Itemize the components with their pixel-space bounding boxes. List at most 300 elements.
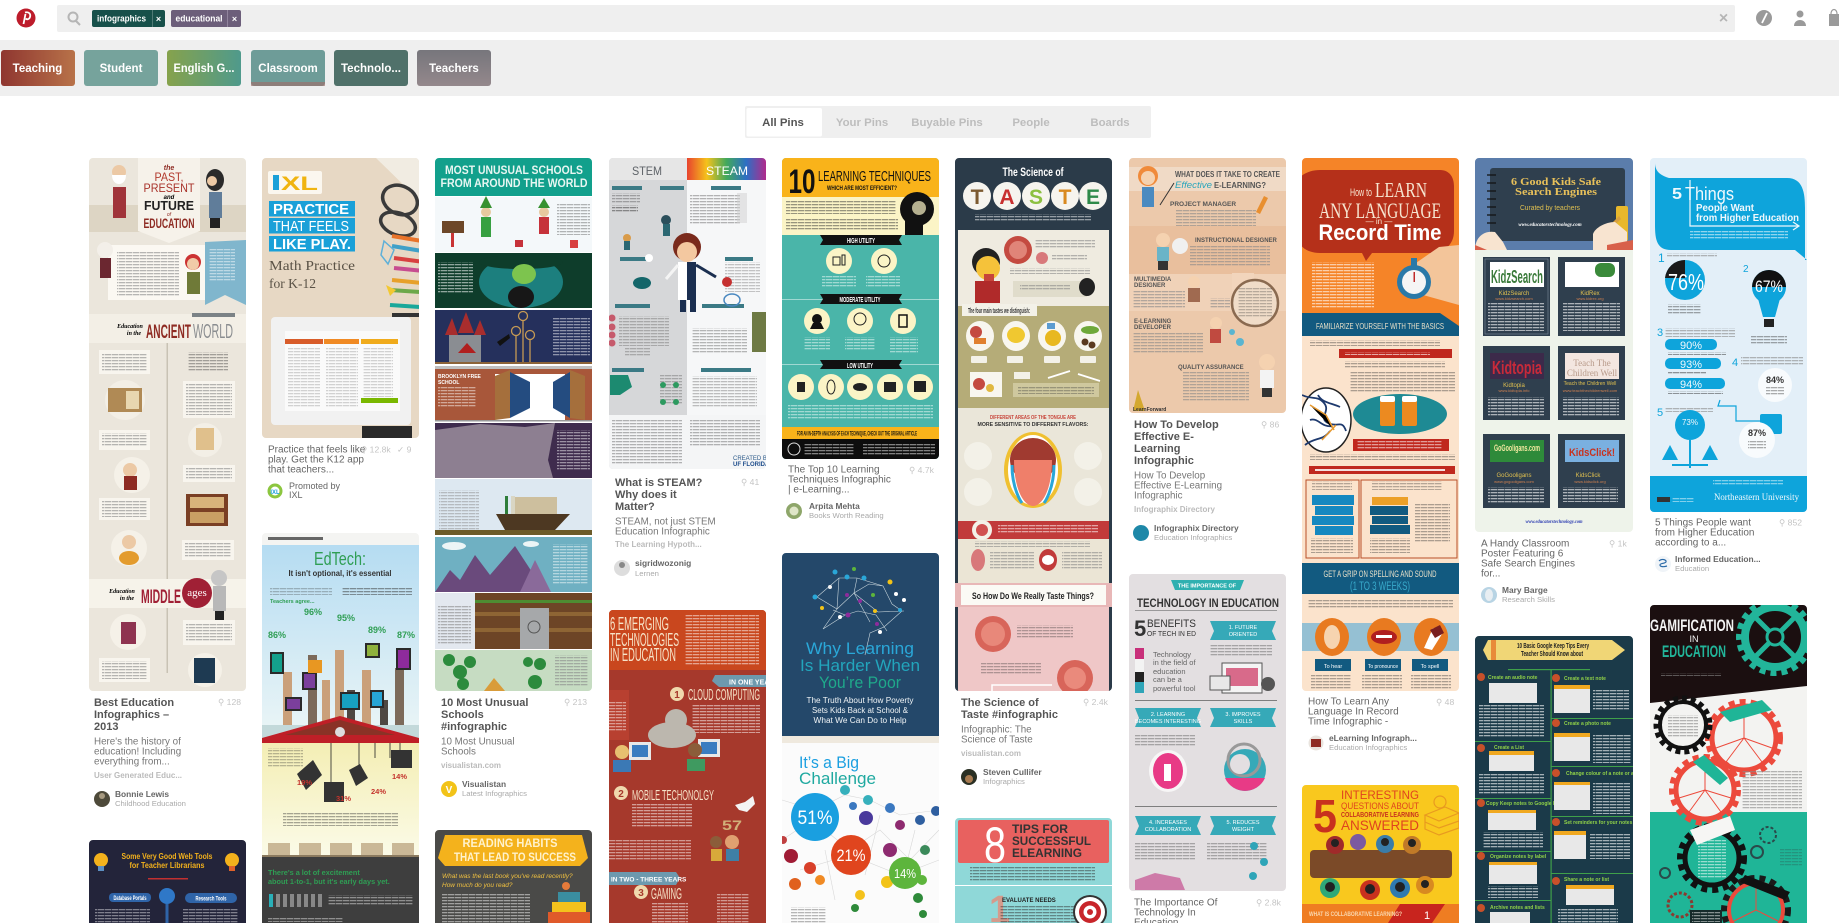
pin: web tools for teacher librarians: Research Tools (196, 896, 227, 902)
pin title: Learning (1134, 443, 1180, 455)
stat: 73 percent scale (1662, 410, 1718, 468)
icon: bag (1829, 10, 1839, 26)
pin attribution: Visualistan (462, 779, 506, 789)
big challenge heading: It’s a Big (799, 753, 859, 772)
pin: reading habits: THAT LEAD TO SUCCESS (454, 852, 576, 864)
pin: google keep tips: Create a photo note (1564, 721, 1611, 727)
stat: 84 percent (1758, 368, 1792, 402)
search engine card: kidtopia: www.kidtopia.info (1499, 388, 1530, 393)
pin: best education infographics (89, 158, 246, 808)
guide tile: student (84, 50, 158, 86)
pin: google keep tips: Create an audio note (1488, 675, 1538, 681)
pin image: learning techniques: LOW UTILITY (847, 361, 873, 370)
active tab: all pins (746, 108, 822, 136)
search chip: educational: educational (176, 14, 222, 24)
guide tile: teachers: Teachers (429, 63, 479, 75)
icon: black gear (1656, 698, 1710, 752)
pin image: five things: People Want (1696, 203, 1755, 214)
pin: six emerging technologies: IN TWO - THREE YEARS (611, 876, 687, 884)
pin image: technology in education: 5 (1134, 616, 1146, 641)
pin title: Infographics – (94, 709, 169, 721)
pin image: effective e-learning: INSTRUCTIONAL DESIGNER (1195, 238, 1278, 244)
pin: edtech: It isn't optional, it's essential (288, 568, 392, 578)
stat: 76 percent (1665, 260, 1705, 300)
pin: reading habits (435, 830, 592, 923)
pin image: science of taste: T (971, 186, 984, 209)
pin source: visualistan.com (441, 761, 501, 770)
pin image: stem vs steam: CREATED BY (733, 456, 771, 462)
pin image: stem vs steam: STEAM (706, 164, 748, 178)
pin image: past present future of education: Education (108, 589, 135, 595)
pin description: STEAM, not just STEM (615, 516, 716, 528)
pin: six emerging technologies: TECHNOLOGIES (610, 630, 679, 650)
pin title: The Top 10 Learning (788, 464, 880, 476)
icon: pinterest logo (16, 8, 36, 28)
pin title: 5 Things People want (1655, 518, 1751, 528)
pin image: effective e-learning: Effective (1175, 180, 1212, 190)
pin image: past present future of education: ages (187, 587, 207, 599)
why learning heading: Why Learning (806, 640, 914, 658)
pin title: Time Infographic - (1308, 716, 1388, 728)
pin image: technology in education: Technology (1153, 650, 1191, 659)
pin: ixl practice (262, 158, 424, 500)
pin: edtech: 24% (371, 787, 386, 796)
active tab: all pins: All Pins (762, 117, 804, 129)
pin image: ixl ad: XL (281, 174, 319, 195)
pin title: | e-Learning... (788, 484, 850, 496)
pin image: past present future of education: WORLD (193, 321, 233, 343)
pin image: learn any language (1296, 158, 1459, 691)
stat: 67 percent bulb: 67% (1755, 277, 1783, 296)
pin image: learn any language: To hear (1324, 664, 1342, 670)
search engine card: teach the children well: Teach The (1573, 358, 1611, 368)
pin description: education! Including (94, 746, 181, 758)
top navigation bar (16, 5, 1839, 32)
pin: edtech: There's a lot of excitement (268, 868, 360, 877)
pin attribution: Research Skills (1502, 595, 1555, 604)
repin count: ⚲ 41 (741, 477, 759, 487)
pin attribution (268, 481, 341, 500)
pin: why learning is harder (779, 553, 941, 923)
pin image: unusual schools (435, 158, 592, 691)
pin image: technology in education: ORIENTED (1229, 632, 1257, 638)
pin: five things from higher education (1650, 158, 1807, 573)
pin title: Schools (441, 709, 484, 721)
pin: 8 tips elearning: SUCCESSFUL (1012, 834, 1091, 848)
pin image: unusual schools: FROM AROUND THE WORLD (440, 178, 588, 190)
pin image: past present future of education: ANCIENT (146, 322, 191, 343)
pin attribution (1481, 585, 1555, 604)
pin: google keep tips: 10 Basic Google Keep Tips Every (1517, 643, 1589, 650)
pin description: How To Develop (1134, 470, 1206, 482)
pin title: Why does it (615, 489, 677, 501)
stat pills (1665, 339, 1726, 394)
icon: profile (1794, 10, 1806, 26)
icon: clear search: × (1719, 10, 1728, 27)
pin image: ixl ad: THAT FEELS (273, 219, 349, 235)
repin count: ⚲ 128 (218, 697, 241, 707)
pin: 8 tips elearning: EVALUATE NEEDS (1002, 898, 1056, 904)
pin image: effective e-learning: DEVELOPER (1134, 325, 1172, 331)
pin image: learning techniques: FOR AN IN-DEPTH ANALYSIS OF EACH TECHNIQUE, CHECK OUT THE ORIGINAL ARTICLE (797, 430, 917, 438)
pin: why learning is harder: You’re Poor (819, 674, 901, 692)
pin: edtech: 31% (336, 794, 351, 803)
pin: gamification in education (1650, 601, 1811, 923)
pin attribution: Arpita Mehta (809, 501, 860, 511)
pin image: technology in education: 3. IMPROVES (1225, 712, 1261, 718)
pin image: learn any language: GET A GRIP ON SPELLING AND SOUND (1324, 569, 1437, 579)
pin title: Practice that feels like (268, 444, 366, 456)
pin: reading habits: What was the last book you've read recently? (442, 873, 573, 880)
pin image: learn any language: — in — (1366, 217, 1392, 226)
pin image: six kids search engines: 6 Good Kids Safe (1511, 176, 1601, 188)
pin: collaborative learning questions: ANSWERED (1341, 817, 1419, 833)
pin image: technology in education: in the field of (1153, 658, 1196, 667)
pin: how to learn any language (1296, 158, 1459, 752)
pin image: technology in education: BECOMES INTERESTING (1135, 719, 1201, 725)
pin: why learning is harder: The Truth About How Poverty (806, 696, 914, 705)
pin attribution: IXL (289, 490, 303, 500)
pin description: Science of Taste (961, 734, 1033, 746)
pin description: Schools (441, 746, 476, 758)
pin attribution: Mary Barge (1502, 585, 1548, 595)
search engine card: kidzsearch: www.kidzsearch.com (1495, 296, 1533, 301)
pin image: effective e-learning: LearnForward (1133, 407, 1166, 413)
guide tile: teaching (1, 50, 75, 86)
pin: google keep tips: Archive notes and lists (1490, 905, 1545, 911)
pin: six emerging technologies: IN EDUCATION (610, 645, 676, 665)
pin image: stem vs steam: UF FLORIDA (733, 462, 770, 468)
guide tile: student: Student (100, 63, 143, 75)
pin: 8 tips elearning: ELEARNING (1012, 846, 1082, 860)
pin image: five things: Northeastern University (1714, 493, 1799, 503)
pin image: science of taste: S (1029, 186, 1043, 209)
pin title: that teachers... (268, 464, 334, 476)
repin count: ⚲ 86 (1261, 420, 1279, 430)
pin attribution: Education (1675, 564, 1709, 573)
pin title: Poster Featuring 6 (1481, 548, 1564, 560)
search engine card: gogooligans: GoGooligans.com (1494, 443, 1540, 453)
pin source: visualistan.com (961, 749, 1021, 758)
repin count: ⚲ 4.7k (909, 465, 935, 475)
icon: compass (1756, 10, 1772, 26)
stat: 73 percent scale: 73% (1682, 418, 1698, 427)
pin: collaborative learning questions: WHAT IS COLLABORATIVE LEARNING? (1309, 911, 1402, 918)
pin title: How To Develop (1134, 419, 1219, 431)
pin: why learning is harder: What We Can Do to Help (814, 716, 907, 725)
pin: why learning is harder: Sets Kids Back at School & (812, 706, 909, 715)
pin image: six kids search engines: Search Engines (1515, 186, 1598, 198)
stat: 87 percent (1739, 422, 1775, 458)
search engine card: kidtopia (1483, 346, 1550, 420)
pin image: past present future of education: PAST, (154, 170, 184, 184)
stat pills: 94% (1680, 379, 1702, 391)
pin attribution (1308, 733, 1417, 752)
pin image: science of taste (955, 158, 1112, 696)
pin: six emerging technologies: 2 (618, 789, 624, 800)
search engine card: gogooligans (1483, 434, 1550, 508)
pin: 8 tips elearning (955, 817, 1112, 923)
pin title: Safe Search Engines (1481, 558, 1575, 570)
pin image: learn any language: (1 TO 3 WEEKS) (1350, 581, 1410, 593)
pin image: past present future of education: PRESENT (144, 181, 195, 195)
pin image: effective e-learning (1129, 158, 1286, 413)
pin image: science of taste: DIFFERENT AREAS OF THE TONGUE ARE (990, 415, 1076, 421)
pin description: 10 Most Unusual (441, 736, 515, 748)
pin image: technology in education: TECHNOLOGY IN EDUCATION (1137, 598, 1279, 610)
pin image: effective e-learning: DESIGNER (1134, 283, 1166, 289)
repin count: ⚲ 48 (1436, 697, 1454, 707)
guide tile: english grammar (167, 50, 241, 86)
pin: google keep tips: Copy Keep notes to Google Docs (1486, 801, 1565, 807)
stat: 76 percent: 76% (1668, 269, 1704, 295)
search engine card: gogooligans: GoGooligans (1496, 473, 1532, 479)
pin attribution (786, 501, 884, 520)
search engine card: kidrex: www.kidrex.org (1576, 296, 1604, 301)
search engine card: kidtopia: Kidtopia (1503, 383, 1526, 389)
pin image: technology in education: OF TECH IN ED (1147, 631, 1196, 638)
search engine card: kidrex (1558, 257, 1625, 336)
pin title: Best Education (94, 697, 174, 709)
pin: web tools for teacher librarians: Database Portals (114, 896, 147, 902)
pin image: technology in education: education (1153, 667, 1186, 676)
pin: gamification in education: EDUCATION (1662, 642, 1726, 661)
pin: web tools for teacher librarians: Some Very Good Web Tools (122, 851, 213, 861)
pin title: A Handy Classroom (1481, 538, 1569, 550)
pin: science of taste (955, 158, 1112, 786)
stat: 87 percent: 87% (1748, 428, 1766, 438)
search engine card: teach the children well: Children Well (1567, 368, 1618, 378)
pin description: Effective E-Learning (1134, 480, 1222, 492)
pin image: ixl ad (262, 158, 424, 438)
pin: google keep tips: Create a List (1494, 745, 1524, 751)
pin image: learning techniques: LEARNING TECHNIQUES (818, 168, 931, 185)
pin title: Language In Record (1308, 706, 1399, 718)
pin image: past present future of education: in the (120, 596, 134, 602)
search engine card: gogooligans: www.gogooligans.com (1494, 479, 1535, 484)
search engine card: kidrex: KidRex (1580, 291, 1600, 297)
pin: collaborative learning questions (1302, 785, 1459, 923)
pin attribution (614, 558, 691, 578)
five things heading: 5 (1672, 186, 1682, 203)
pin source: Infographix Directory (1134, 505, 1215, 514)
pin attribution (1655, 554, 1761, 573)
pin image: effective e-learning: QUALITY ASSURANCE (1178, 365, 1244, 371)
pin: six emerging technologies: 57 (722, 817, 742, 833)
pin title: Technology In (1134, 908, 1196, 918)
pin attribution: Education Infographics (1329, 743, 1407, 752)
search engine card: teach the children well (1558, 346, 1625, 420)
search engine card: kidtopia: Kidtopia (1492, 358, 1543, 378)
pin title: #infographic (441, 721, 507, 733)
guided search band (0, 40, 1839, 96)
pin: edtech: 86% (268, 630, 286, 640)
pin attribution: Promoted by (289, 481, 341, 491)
search field (57, 5, 1735, 32)
pin: google keep tips: Set reminders for your notes (1564, 820, 1633, 826)
guide tile: classroom (251, 50, 325, 86)
pin image: science of taste: A (999, 186, 1015, 209)
search engine card: kidzsearch: KidzSearch (1491, 267, 1543, 287)
pin: why learning is harder: Challenge (799, 769, 876, 788)
pin description: everything from... (94, 756, 170, 768)
pin title: The Importance Of (1134, 898, 1218, 908)
icon: teal gear (1739, 601, 1811, 673)
pin: google keep tips: Share a note or list (1564, 877, 1609, 883)
pin image: unusual schools: BROOKLYN FREE (438, 374, 482, 380)
pin: edtech: 87% (397, 630, 415, 640)
stat pills: 90% (1680, 340, 1702, 352)
pin attribution: Informed Education... (1675, 554, 1761, 564)
pin source: The Learning Hypoth... (615, 540, 702, 549)
pin image: technology in education: BENEFITS (1147, 618, 1196, 630)
pin image: ixl ad: Math Practice (269, 259, 355, 274)
pin image: past present future of education (89, 158, 246, 691)
icon: brain (1301, 388, 1351, 452)
pin: 8 tips elearning: TIPS FOR (1012, 822, 1068, 836)
tab: people: People (1012, 117, 1050, 129)
guide tile: english grammar: English G... (174, 63, 234, 75)
pin: six emerging technologies: 3 (638, 888, 644, 899)
pin: edtech: 96% (304, 607, 322, 617)
pin description: Here's the history of (94, 736, 181, 748)
pin image: effective e-learning: WHAT DOES IT TAKE TO CREATE (1175, 169, 1280, 179)
pin attribution: IXL (270, 490, 280, 496)
pin attribution: eLearning Infograph... (1329, 733, 1417, 743)
stat pills: 93% (1680, 359, 1702, 371)
pin image: unusual schools: SCHOOL (438, 380, 459, 386)
pin image: five things: 2 (1743, 264, 1749, 275)
tab: buyable pins: Buyable Pins (911, 117, 983, 129)
pin: collaborative learning questions: 5 (1313, 790, 1337, 842)
pin attribution: Infographics (983, 777, 1025, 786)
pin: collaborative learning questions: INTERESTING (1341, 788, 1419, 802)
pin: edtech (262, 533, 419, 923)
pin title: Infographic (1134, 455, 1194, 467)
pin image: learning techniques: HIGH UTILITY (847, 236, 875, 245)
pin image: technology in education: 4. INCREASES (1149, 820, 1187, 826)
pin image: technology in education: COLLABORATION (1145, 827, 1191, 833)
guide tile: teachers (417, 50, 491, 86)
pin: most unusual schools (435, 158, 592, 798)
pin: what is steam (608, 158, 771, 578)
tab: your pins: Your Pins (836, 117, 888, 129)
repin count: ⚲ 12.8k (361, 444, 391, 454)
pin: google keep tips (1475, 636, 1643, 923)
pin: six emerging technologies: GAMING (651, 886, 682, 903)
pin: reading habits: How much do you read? (442, 882, 513, 889)
pin: gamification in education: IN (1690, 634, 1698, 644)
pin image: six kids search engines (1475, 158, 1633, 532)
gamification heading: GAMIFICATION (1650, 616, 1734, 635)
repin count: ⚲ 2.4k (1083, 697, 1109, 707)
tab: boards: Boards (1090, 117, 1130, 129)
pin image: learn any language: ANY LANGUAGE (1319, 198, 1441, 223)
pin: collaborative learning questions: COLLABORATIVE LEARNING (1341, 810, 1419, 819)
pin: google keep tips: Change colour of a note or a list (1566, 771, 1643, 777)
search engine card: teach the children well: www.teachthechildrenwell.com (1563, 388, 1618, 393)
pin image: five things: 1 (1658, 251, 1665, 265)
pin: six emerging technologies (609, 610, 774, 923)
pin title: 10 Most Unusual (441, 697, 528, 709)
stat: 51 percent (791, 793, 839, 841)
guide tile: technology: Technolo... (341, 63, 401, 75)
pin image: five things: 3 (1657, 327, 1663, 339)
guide tile: technology (334, 50, 408, 86)
pin title: The Science of (961, 697, 1039, 709)
pin: edtech: 89% (368, 625, 386, 635)
pin attribution: Books Worth Reading (809, 511, 884, 520)
pin image: learning techniques: 10 (788, 163, 816, 201)
pin image: five things: 5 (1657, 407, 1663, 419)
pin: edtech: Teachers agree... (270, 599, 315, 605)
pin title: How To Learn Any (1308, 696, 1389, 708)
search chip: infographics (92, 10, 165, 27)
pin image: learning techniques (782, 158, 939, 459)
pin title: play. Get the K12 app (268, 454, 364, 466)
pin image: science of taste: The Science of (1002, 165, 1064, 179)
search chip: educational: × (232, 14, 237, 24)
pin attribution (1133, 523, 1239, 542)
pin attribution (441, 779, 527, 798)
search chip: infographics: infographics (97, 14, 146, 24)
pin image: science of taste: The four main tastes we distinguish: (968, 308, 1030, 315)
pin image: technology in education: THE IMPORTANCE OF (1178, 584, 1237, 590)
pin: six emerging technologies: IN ONE YEAR (729, 680, 774, 686)
pin attribution: Latest Infographics (462, 789, 527, 798)
pin: google keep tips: Create a text note (1564, 676, 1606, 682)
stat: 14 percent (889, 857, 921, 889)
pin image: learning techniques: WHICH ARE MOST EFFICIENT? (827, 185, 897, 192)
pin: six emerging technologies: MOBILE TECHONOLGY (632, 787, 714, 804)
edtech heading: EdTech: (314, 549, 366, 569)
search engine card: kidzsearch: KidzSearch (1499, 291, 1529, 297)
search chip: educational (171, 10, 241, 27)
pin image: learn any language: Record Time (1318, 220, 1442, 245)
pin title: Matter? (615, 501, 655, 513)
pin: collaborative learning questions: 1 (1424, 910, 1430, 922)
pin: how to develop effective e-learning (1129, 158, 1286, 542)
result type tabs (745, 106, 1151, 138)
pin image: effective e-learning: E-LEARNING? (1214, 181, 1266, 190)
pin image: past present future of education: the (164, 165, 174, 172)
pin title: according to a... (1655, 538, 1726, 548)
pin image: science of taste: T (1059, 186, 1072, 209)
pin image: effective e-learning: E-LEARNING (1134, 319, 1172, 325)
repin count: ⚲ 213 (564, 697, 587, 707)
pin image: ixl ad: LIKE PLAY. (273, 237, 351, 253)
save count: ✓ 9 (397, 444, 412, 454)
pin attribution (961, 767, 1042, 786)
pin image: learn any language: FAMILIARIZE YOURSELF WITH THE BASICS (1316, 321, 1444, 331)
stat: 14 percent: 14% (894, 866, 916, 881)
repin count: ⚲ 852 (1779, 518, 1802, 528)
pin image: science of taste: E (1086, 186, 1100, 209)
tips heading: 8 (984, 817, 1006, 873)
pin image: five things: from Higher Education (1696, 213, 1799, 224)
pin image: effective e-learning: PROJECT MANAGER (1170, 201, 1236, 208)
pin attribution: Bonnie Lewis (115, 789, 169, 799)
pin attribution: Lernen (635, 569, 659, 578)
search chip: infographics: × (156, 14, 161, 24)
search engine card: teach the children well: Teach the Children Well (1564, 381, 1616, 387)
pin: six emerging technologies: 1 (674, 690, 680, 701)
emerging technologies heading: 6 EMERGING (610, 614, 669, 634)
icon: red dynamics gear (1672, 757, 1738, 823)
icon: search (68, 12, 80, 25)
icon: red needs gear (1724, 878, 1788, 923)
pin attribution: V (446, 785, 453, 796)
